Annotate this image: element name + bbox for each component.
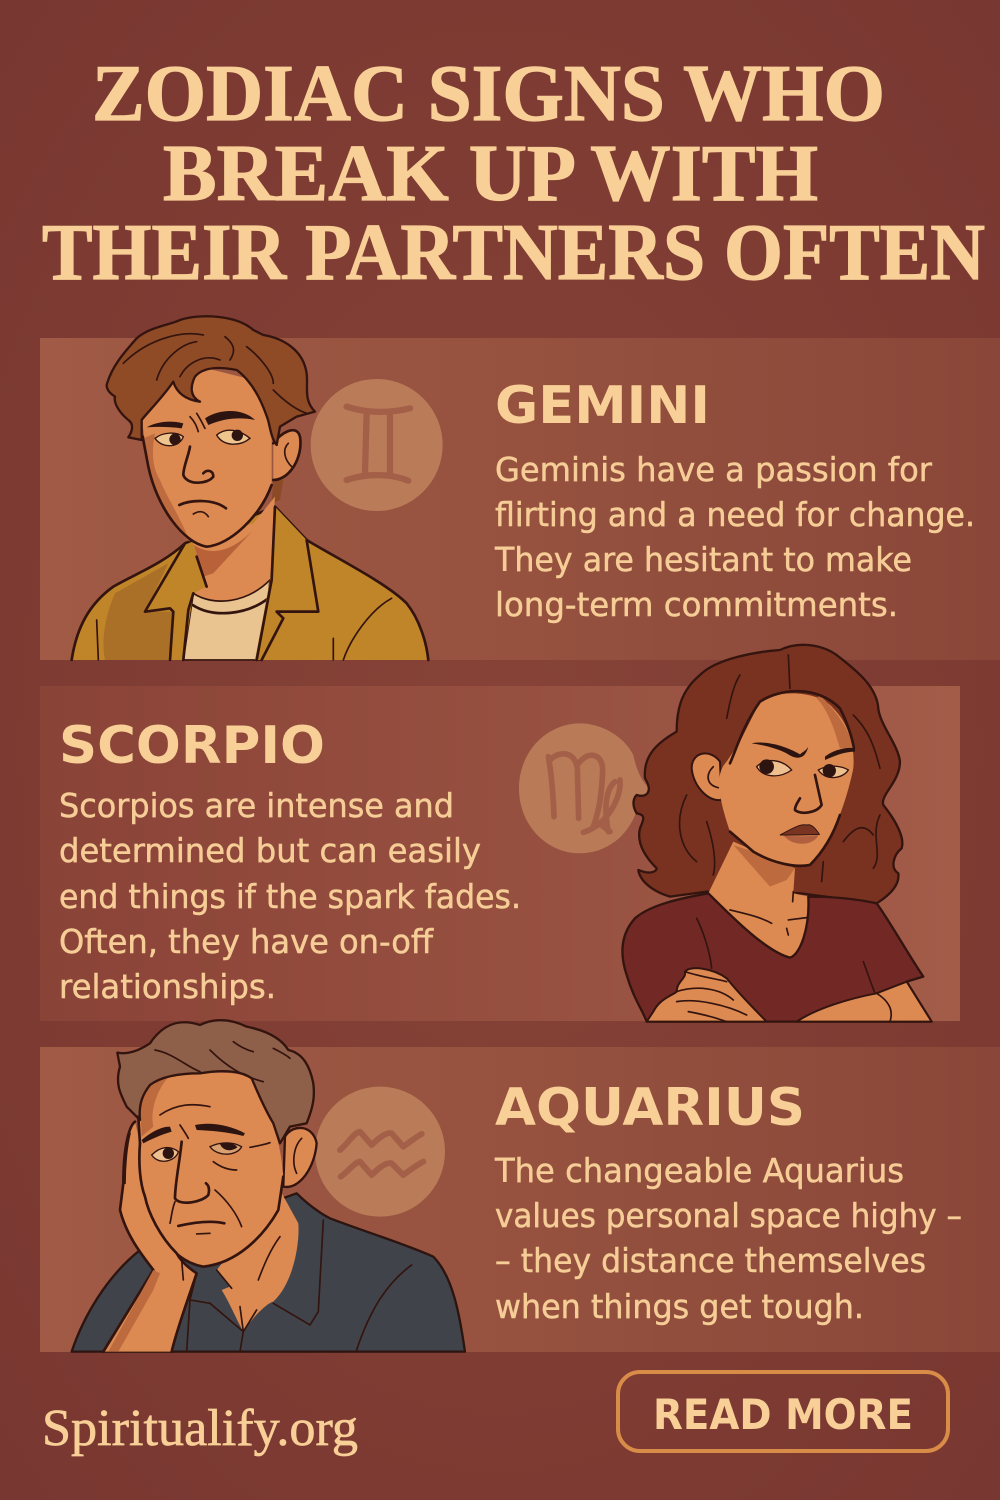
aquarius heading: AQUARIUS <box>495 1078 805 1138</box>
gemini panel background <box>40 338 1000 660</box>
scorpio panel background <box>40 686 960 1021</box>
title: ZODIAC SIGNS WHO <box>92 50 885 138</box>
scorpio body text: Scorpios are intense and <box>59 786 454 825</box>
gemini body text: Geminis have a passion for <box>495 450 932 489</box>
aquarius panel background <box>40 1047 1000 1352</box>
icon: aquarius symbol <box>315 1087 445 1217</box>
illustration: woman with crossed arms <box>622 645 932 1022</box>
panel: aquarius <box>40 1020 1000 1352</box>
gemini heading: GEMINI <box>495 376 710 436</box>
scorpio heading: SCORPIO <box>59 716 325 776</box>
aquarius body text <box>494 1151 962 1326</box>
scorpio body text: relationships. <box>59 967 276 1006</box>
gemini body text: long-term commitments. <box>495 585 898 624</box>
button: read more: READ MORE <box>653 1390 913 1439</box>
scorpio body text: Often, they have on-off <box>59 922 434 961</box>
panel: scorpio <box>40 645 960 1022</box>
aquarius body text: when things get tough. <box>495 1287 864 1326</box>
panel: gemini <box>40 316 1000 660</box>
title: BREAK UP WITH <box>163 130 818 218</box>
aquarius body text: – they distance themselves <box>495 1241 926 1280</box>
scorpio body text: determined but can easily <box>59 831 481 870</box>
gemini body text: flirting and a need for change. <box>495 495 975 534</box>
scorpio body text: end things if the spark fades. <box>59 877 521 916</box>
aquarius body text: The changeable Aquarius <box>494 1151 904 1190</box>
gemini body text <box>494 450 975 624</box>
illustration: young man with jacket <box>72 316 428 660</box>
button: read more <box>618 1372 948 1451</box>
site name: Spiritualify.org <box>42 1400 358 1457</box>
icon: gemini symbol <box>311 379 443 511</box>
gemini body text: They are hesitant to make <box>494 540 912 579</box>
illustration: tired older man <box>72 1020 465 1352</box>
title <box>42 50 985 297</box>
icon: virgo-style symbol <box>519 723 653 853</box>
scorpio body text <box>59 786 521 1006</box>
aquarius body text: values personal space highy – <box>495 1196 962 1235</box>
